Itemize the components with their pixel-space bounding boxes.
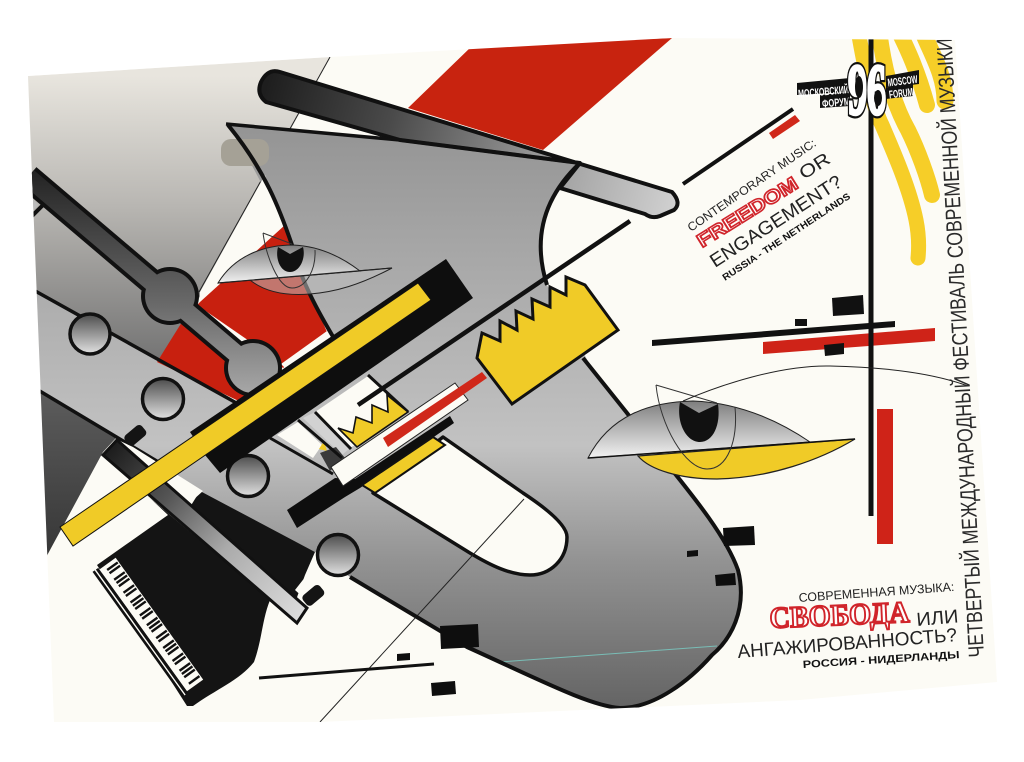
red stripe center [383, 372, 487, 447]
white U cut-out in saxophone [373, 437, 567, 575]
black bar lower center [287, 416, 454, 528]
thin diagonal line lower [320, 499, 524, 722]
logo number 96 outline: 96 [848, 50, 886, 130]
key rod with two pads [28, 177, 282, 397]
russia netherlands russian line: РОССИЯ - НИДЕРЛАНДЫ [802, 649, 960, 671]
big yellow crown [477, 277, 618, 404]
top-right short black line [683, 109, 793, 184]
grand piano [93, 423, 326, 706]
piano body upper [190, 491, 315, 600]
keyboard [93, 556, 204, 697]
stain [221, 139, 269, 166]
black block on red bar [824, 343, 844, 356]
round key 1 [70, 314, 110, 354]
red diagonal band [408, 38, 672, 150]
or word: OR [795, 149, 834, 183]
central rods [270, 375, 408, 474]
saxophone outer outline [350, 358, 741, 708]
small black block [795, 319, 807, 326]
freedom outlined word: FREEDOM [694, 173, 802, 252]
engagement russian line: АНГАЖИРОВАННОСТЬ? [737, 625, 958, 663]
rod peg top [124, 425, 146, 446]
yellow strip lower center [362, 437, 445, 493]
russia netherlands line: RUSSIA - THE NETHERLANDS [721, 191, 853, 284]
dark triangle left [40, 392, 116, 556]
saxophone body [28, 125, 741, 708]
logo black plates [797, 70, 919, 108]
cyan scan line [500, 646, 717, 662]
long horizontal black line right [652, 321, 895, 346]
logo text russian [798, 83, 851, 112]
arc from eye across page [683, 366, 968, 401]
piano body lower [97, 498, 270, 706]
engagement line: ENGAGEMENT? [706, 172, 846, 272]
piano rod [103, 440, 307, 623]
logo number 96: 96 [848, 50, 886, 130]
red wedge lower [157, 324, 244, 400]
rod peg bottom [302, 585, 324, 606]
long yellow bar [60, 283, 431, 546]
round key 2 [142, 378, 184, 420]
white triangle under eye [200, 175, 285, 302]
white strip above rod [120, 441, 203, 498]
russian heading block [737, 580, 960, 671]
lower black horizontal line [259, 664, 434, 678]
contemporary music russian line: СОВРЕМЕННАЯ МУЗЫКА: [798, 580, 955, 605]
english heading block [685, 136, 853, 284]
round key 3 [228, 456, 268, 496]
svoboda outlined word: СВОБОДА [769, 596, 910, 635]
black block above line [832, 295, 864, 316]
bell outline [226, 124, 580, 340]
saxophone neck [259, 71, 678, 217]
vertical red bar [877, 409, 893, 544]
logo text russian: МОСКОВСКИЙ [798, 83, 850, 101]
long horizontal red bar right [763, 328, 935, 354]
white piece near rod end [295, 578, 304, 594]
red wedge upper [197, 225, 327, 368]
small yellow crown [338, 395, 408, 447]
white strip center [331, 383, 468, 486]
small eye [218, 233, 392, 294]
grey backdrop upper left [28, 57, 330, 362]
black blocks on lower edge [397, 526, 755, 696]
logo text english: FORUM [888, 87, 914, 101]
thin diagonal line top [199, 57, 330, 292]
contemporary music line: CONTEMPORARY MUSIC: [685, 136, 819, 234]
logo: Moscow Forum 96 [797, 50, 920, 130]
logo text english [887, 74, 920, 101]
vertical black line [868, 38, 874, 516]
logo text english: MOSCOW [887, 74, 919, 89]
round key 4 [318, 534, 358, 576]
white strip by red wedge [282, 331, 331, 368]
long black diagonal line [358, 221, 630, 405]
logo number counters [855, 76, 882, 106]
large eye [588, 366, 968, 479]
top-right red tab [769, 115, 800, 139]
band outlines [28, 287, 240, 466]
logo text russian: ФОРУМ [822, 96, 851, 110]
yellow brush strokes [858, 30, 945, 258]
black bar behind yellow bar [190, 259, 473, 473]
ili word: ИЛИ [916, 606, 959, 631]
